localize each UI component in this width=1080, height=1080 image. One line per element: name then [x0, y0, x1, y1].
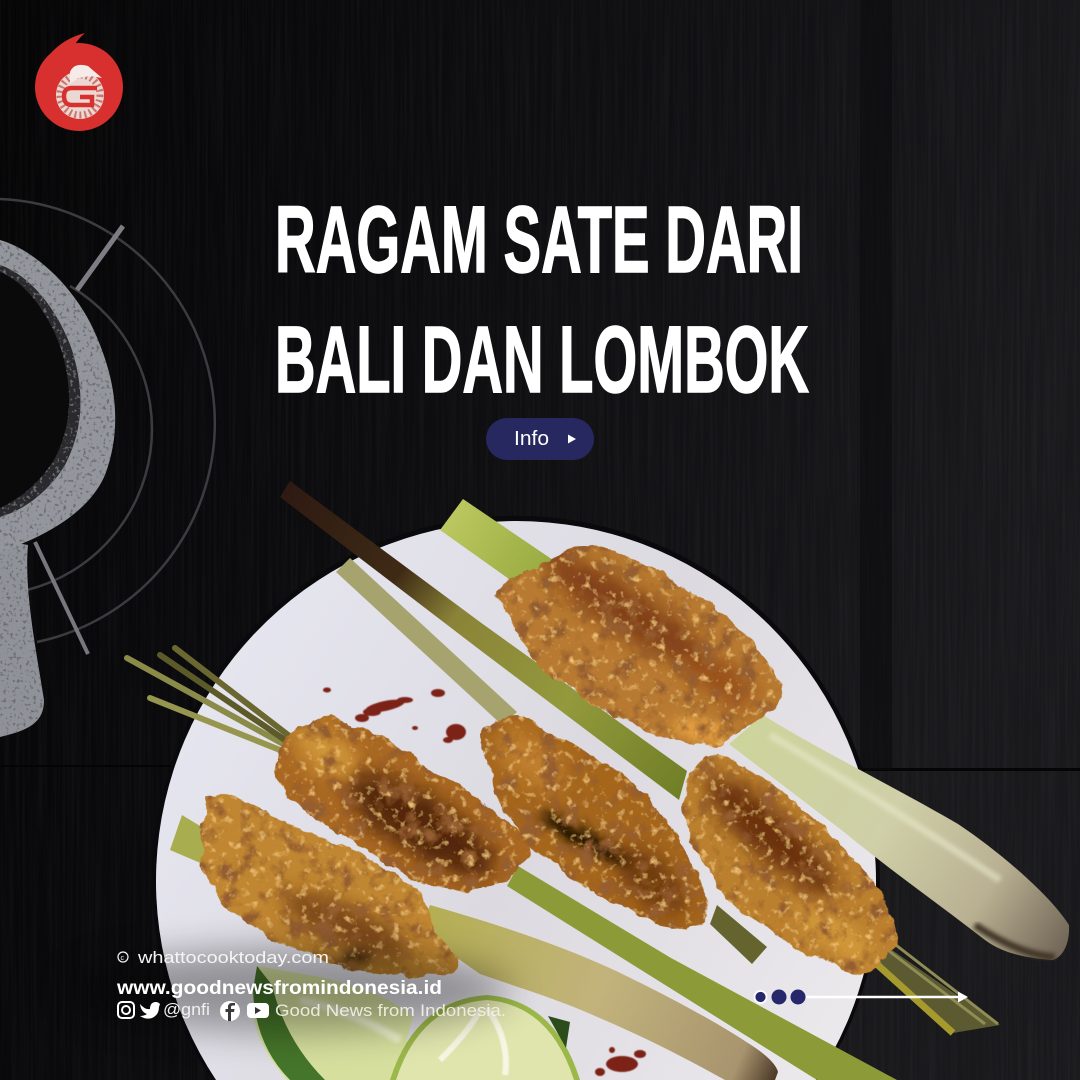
grilled sate: right [683, 752, 901, 975]
image credit: c [120, 955, 124, 962]
handle: @gnfi [163, 1001, 210, 1019]
grilled sate: top [495, 538, 784, 748]
lemongrass skewer: long green stalk [507, 866, 897, 1080]
image credit: whattocooktoday.com [137, 948, 329, 967]
title [275, 187, 809, 413]
icon: facebook [220, 1001, 240, 1021]
logo [35, 33, 123, 131]
lemongrass skewer: pale middle stalk [336, 558, 767, 964]
plate [152, 516, 880, 1080]
wire bowl stand [0, 199, 215, 654]
info button: Info [514, 428, 549, 450]
bowl interior [0, 272, 69, 508]
lemongrass bundle: right ends [870, 942, 1000, 1033]
website url: www.goodnewsfromindonesia.id [116, 977, 442, 999]
grilled sate: middle [480, 713, 706, 928]
shadow behind footer text [70, 948, 510, 1032]
pagination dots and arrow [754, 990, 968, 1004]
stone bowl with handle [0, 240, 115, 737]
icon: instagram [118, 1002, 134, 1018]
lemongrass skewer: dark top stalk [280, 481, 687, 800]
social icons and handles [118, 1001, 506, 1021]
lemongrass skewer: bottom pale stalk [170, 815, 778, 1080]
plate sauce stains [323, 688, 646, 1076]
lemongrass bundle: left ends [127, 648, 292, 752]
grilled sate: left [273, 715, 532, 895]
grilled sate: bottom [200, 794, 463, 977]
icon: twitter [140, 1002, 160, 1019]
channel name: Good News from Indonesia. [275, 1002, 506, 1020]
lime wedges [253, 966, 580, 1080]
info button [486, 418, 594, 460]
lemongrass skewer: top right thick stalk [440, 499, 1069, 960]
icon: youtube [247, 1003, 269, 1018]
